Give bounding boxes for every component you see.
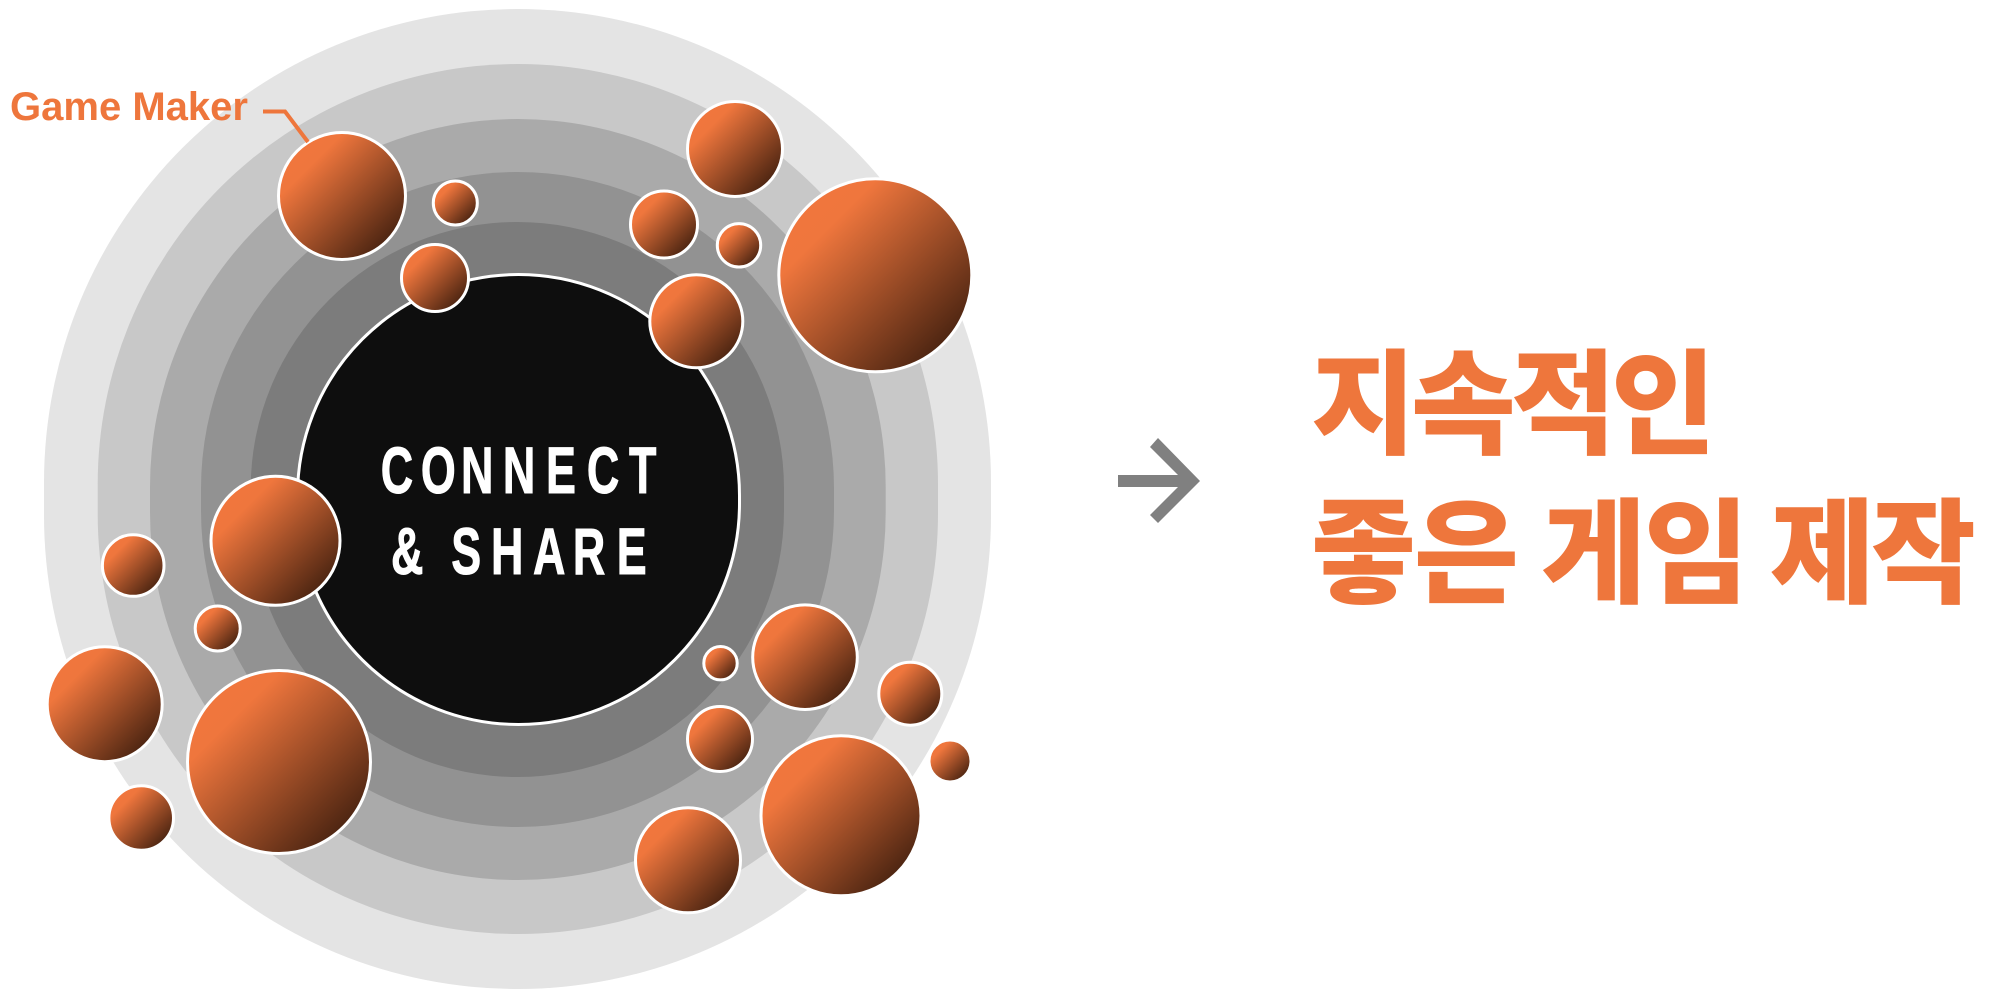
headline	[1311, 343, 1976, 619]
headline: 지속적인	[1311, 343, 1716, 470]
central black core	[298, 274, 740, 724]
arrow	[1118, 438, 1200, 523]
leader line	[263, 112, 308, 142]
core title: connect and share: CONNECT	[381, 433, 656, 507]
headline: 좋은게임제작	[1311, 492, 1976, 619]
game maker bubbles	[47, 102, 972, 913]
core title: connect and share	[381, 433, 656, 588]
concentric rings diagram	[44, 9, 991, 989]
game maker label: Game Maker	[10, 85, 248, 129]
core title: connect and share: &SHARE	[391, 514, 647, 588]
